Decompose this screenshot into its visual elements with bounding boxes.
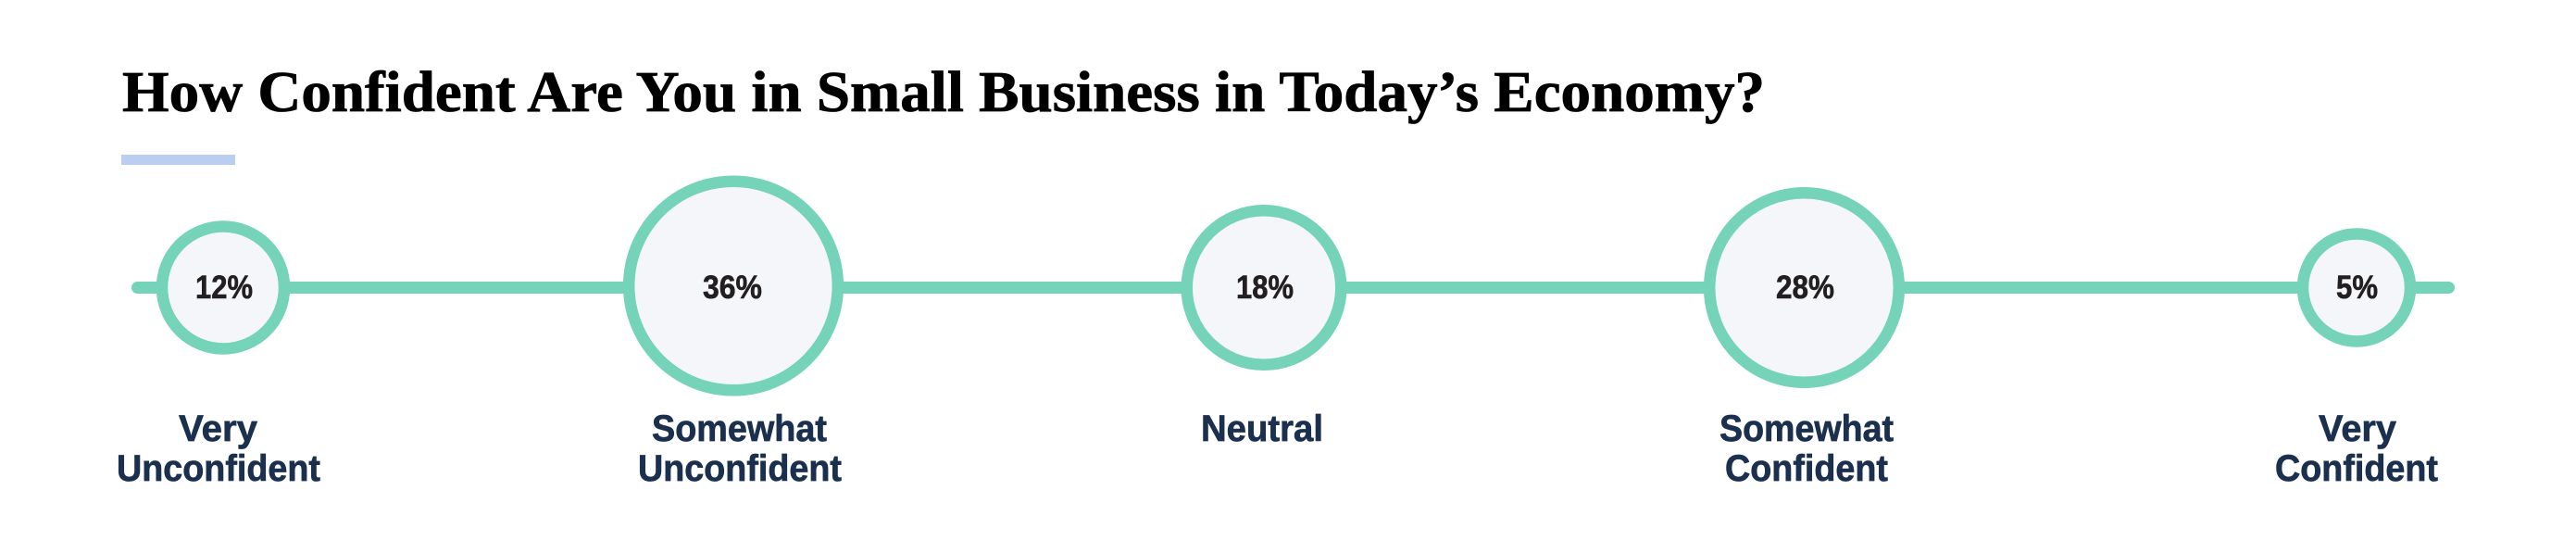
data point: neutral 18%: 18% — [1236, 270, 1294, 306]
label: very confident: Very — [2319, 408, 2397, 449]
data point: neutral 18% — [1187, 210, 1341, 365]
data point: very unconfident 12%: 12% — [195, 270, 253, 306]
label: very unconfident: Unconfident — [117, 448, 320, 489]
data point: very confident 5% — [2303, 233, 2410, 341]
timeline line — [131, 282, 2455, 294]
label: somewhat unconfident: Unconfident — [638, 448, 842, 489]
data point: somewhat confident 28% — [1709, 193, 1899, 383]
label: very confident: Confident — [2275, 448, 2438, 489]
label: very unconfident: Very — [179, 408, 258, 449]
data point: very unconfident 12% — [162, 226, 284, 348]
label: very confident — [2275, 408, 2438, 489]
title: How Confident Are You in Small Business in Today’s Economy? — [122, 61, 1765, 124]
title accent bar — [121, 155, 235, 165]
label: somewhat confident: Confident — [1725, 448, 1888, 489]
data point: very confident 5%: 5% — [2336, 270, 2378, 306]
label: somewhat unconfident: Somewhat — [652, 408, 827, 449]
label: neutral: Neutral — [1201, 408, 1323, 449]
label: somewhat confident: Somewhat — [1719, 408, 1894, 449]
data point: somewhat unconfident 36% — [629, 182, 838, 390]
label: somewhat confident — [1719, 408, 1894, 489]
data point: somewhat confident 28%: 28% — [1776, 270, 1834, 306]
label: somewhat unconfident — [638, 408, 842, 489]
label: very unconfident — [117, 408, 320, 489]
data point: somewhat unconfident 36%: 36% — [703, 270, 762, 306]
